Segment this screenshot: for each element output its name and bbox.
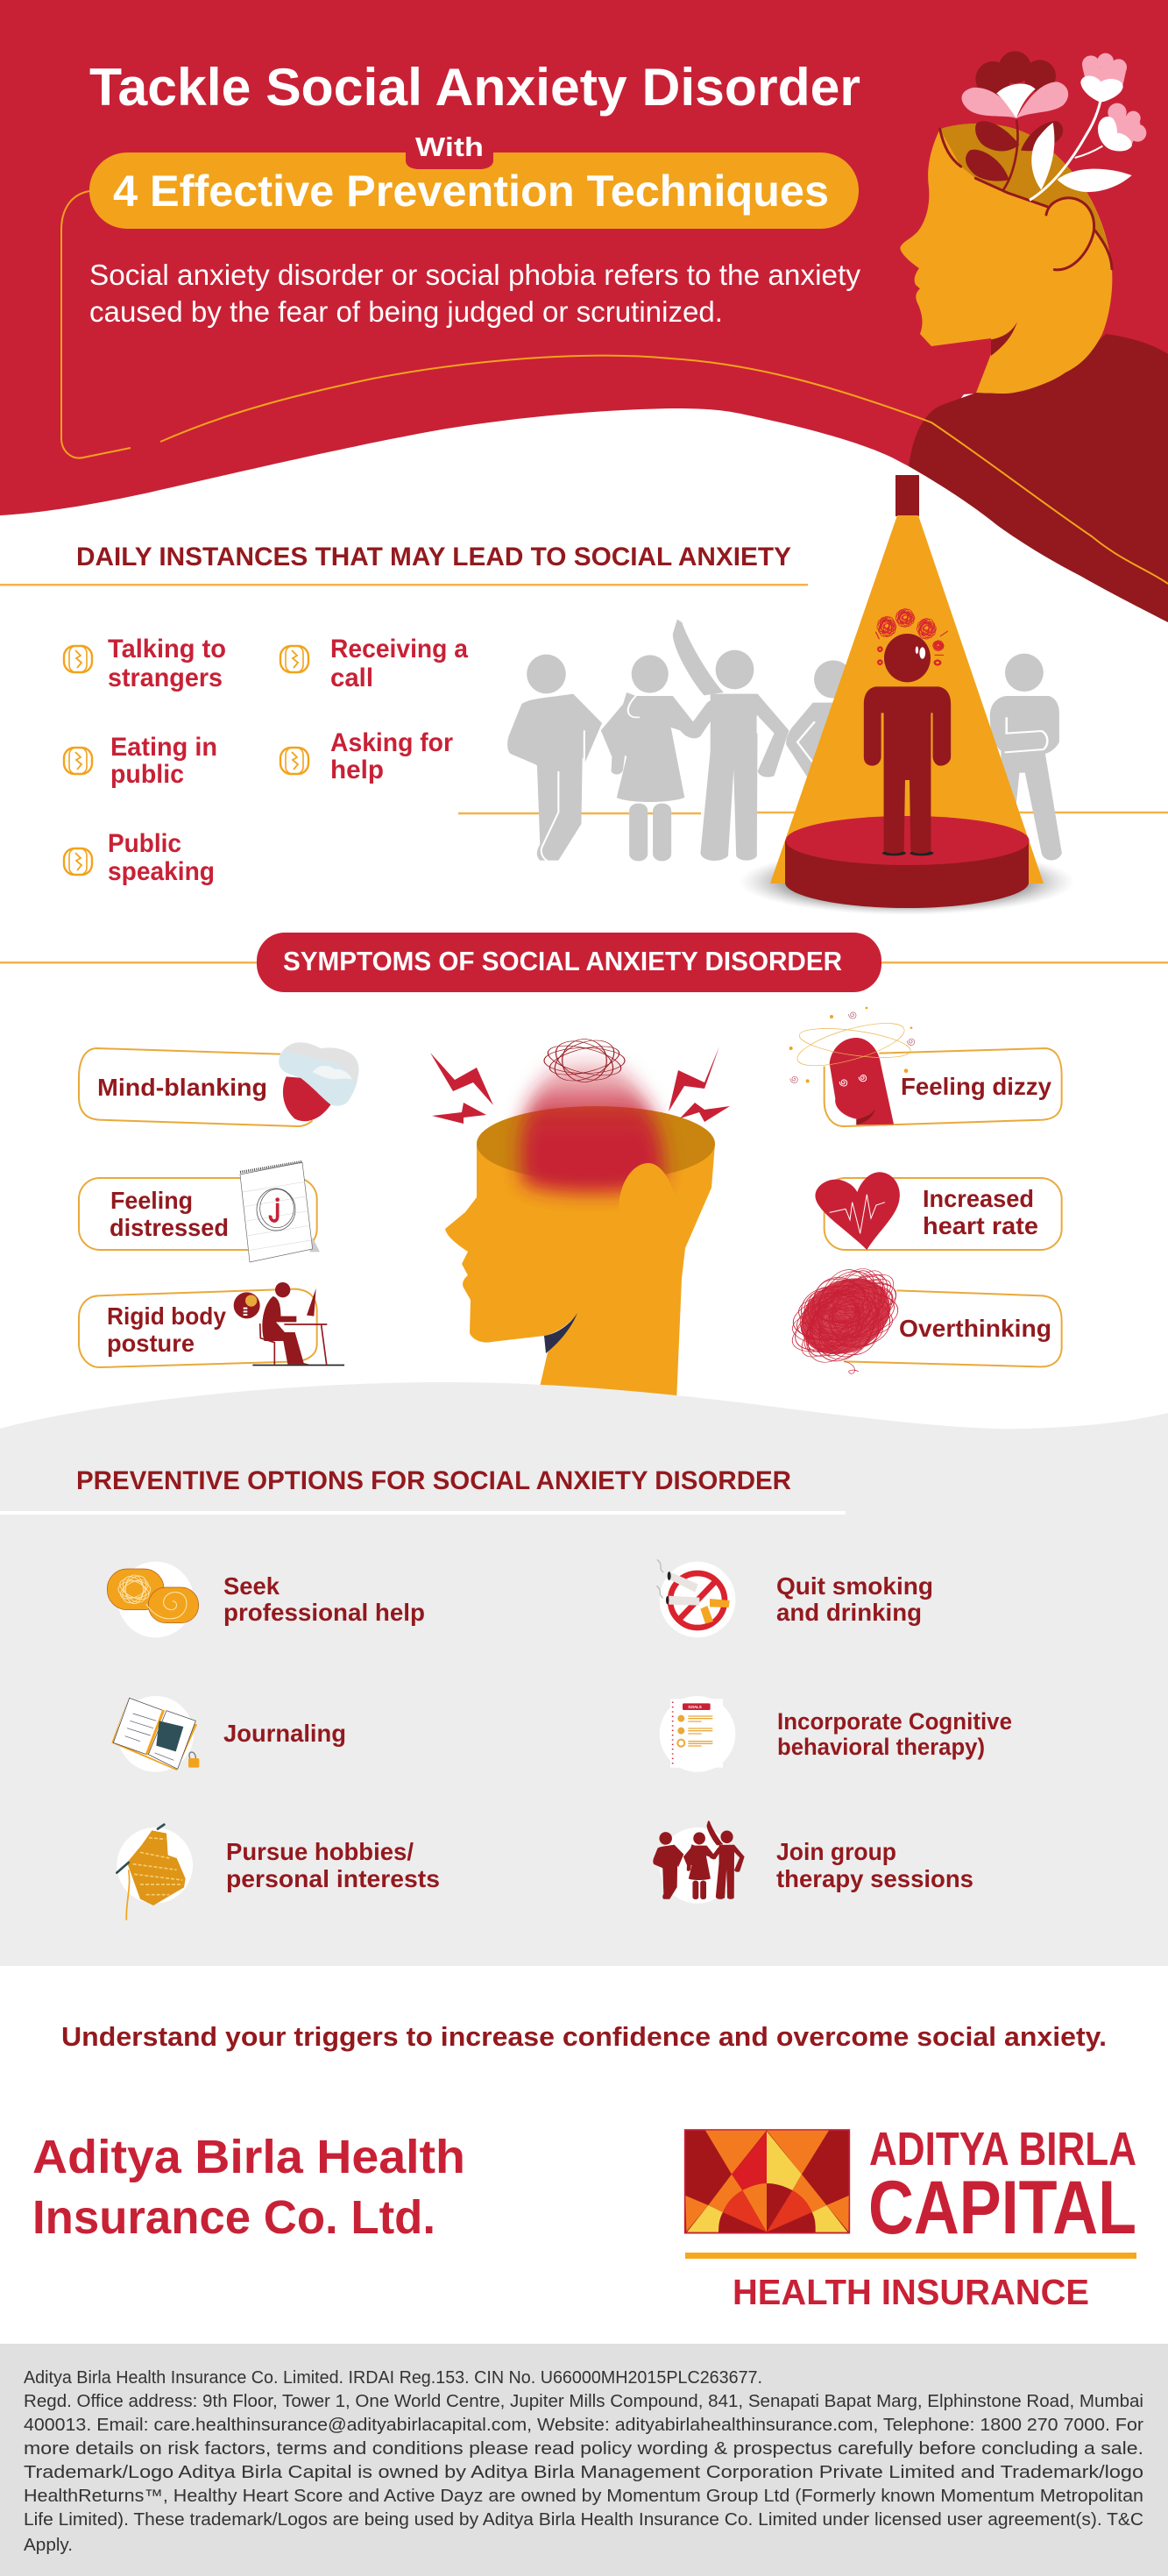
symptom labels: distressed: [110, 1214, 229, 1241]
decorative connector line: [61, 191, 1168, 584]
item: talking to strangers: Talking to: [108, 635, 226, 664]
illustration: central head: [445, 1059, 715, 1402]
panel: disclaimer footer: Life Limited). These trademark/Logos are being used by Aditya Birla Health Insurance Co. Limited under licensed user agreement(s). T&C: [24, 2510, 1143, 2530]
item: asking for help: [280, 728, 453, 784]
list: daily instances: [64, 635, 468, 886]
item: public speaking: Public: [108, 829, 181, 858]
list labels: preventive options: and drinking: [776, 1599, 922, 1626]
item: talking to strangers: [64, 635, 226, 692]
panel: disclaimer footer: Regd. Office address: 9th Floor, Tower 1, One World Centre, Jupiter Mills Compound, 841, Senapati Bapat Marg, Elphinstone Road, Mumbai: [24, 2392, 1143, 2411]
symptom labels: Rigid body: [107, 1302, 226, 1330]
item: public speaking: [64, 829, 215, 886]
symptom boxes right: [768, 1007, 1062, 1388]
symptom labels: heart rate: [923, 1212, 1038, 1239]
list labels: preventive options: Seek: [223, 1572, 280, 1600]
scribble above head: [539, 1035, 630, 1086]
icon: goals list: [660, 1696, 735, 1772]
shadow under pedestal: [739, 848, 1075, 915]
list labels: preventive options: Journaling: [223, 1720, 346, 1747]
icon: quit smoking: [656, 1559, 735, 1637]
icon: knitting: [117, 1825, 193, 1920]
symptom labels: Increased: [923, 1185, 1034, 1212]
logo: Aditya Birla Capital: HEALTH INSURANCE: [733, 2272, 1089, 2312]
box: overthinking: [768, 1240, 1062, 1388]
panel: disclaimer footer: 400013. Email: care.healthinsurance@adityabirlacapital.com, Website: adityabirlahealthinsurance.com, Telephone: 1800 270 7000. For: [24, 2416, 1143, 2435]
box: increased heart rate: [815, 1172, 1062, 1250]
box: feeling dizzy: [789, 1007, 1062, 1126]
icons: right column: [653, 1559, 745, 1904]
orange subtitle pill: With: [415, 131, 484, 162]
item: receiving a call: call: [330, 664, 373, 692]
intro text: [89, 259, 861, 328]
icon: group therapy: [653, 1820, 745, 1904]
heading: symptoms pill: [0, 933, 1168, 992]
spotlight lamp: [895, 475, 919, 516]
list labels: preventive options: therapy sessions: [776, 1865, 973, 1892]
item: eating in public: Eating in: [110, 733, 217, 762]
panel: disclaimer footer: more details on risk factors, terms and conditions please read policy wording & prospectus carefully before concluding a sale.: [24, 2439, 1143, 2459]
logo mark: [685, 2130, 849, 2233]
symptom boxes left: [79, 1042, 359, 1367]
spotlight cone: [770, 515, 1044, 884]
company name: [32, 2131, 465, 2244]
list labels: preventive options: behavioral therapy): [777, 1734, 985, 1760]
company name: Aditya Birla Health: [32, 2131, 465, 2183]
pedestal: [785, 816, 1029, 908]
intro text: caused by the fear of being judged or scrutinized.: [89, 295, 723, 328]
item: talking to strangers: strangers: [108, 664, 223, 692]
item: asking for help: Asking for: [330, 728, 453, 757]
symptom labels: posture: [107, 1330, 195, 1357]
list labels: preventive options: personal interests: [226, 1865, 440, 1892]
list labels: preventive options: Incorporate Cognitive: [777, 1708, 1012, 1735]
symptom labels: [97, 1073, 1051, 1357]
orange subtitle pill: 4 Effective Prevention Techniques: [113, 167, 829, 216]
illustration: grey crowd: [507, 620, 1062, 861]
panel: disclaimer footer: Apply.: [24, 2536, 73, 2555]
heading: preventive options: PREVENTIVE OPTIONS FOR SOCIAL ANXIETY DISORDER: [76, 1466, 791, 1495]
symptom labels: Feeling dizzy: [901, 1073, 1051, 1100]
icon: journaling: [111, 1696, 199, 1772]
panel: disclaimer footer: Aditya Birla Health Insurance Co. Limited. IRDAI Reg.153. CIN No. U66000MH2015PLC263677.: [24, 2368, 762, 2388]
box: feeling distressed: [79, 1161, 320, 1262]
panel: disclaimer footer: [0, 2344, 1168, 2576]
company name: Insurance Co. Ltd.: [32, 2191, 435, 2244]
list labels: preventive options: professional help: [223, 1599, 425, 1626]
illustration: man in spotlight: [864, 634, 951, 855]
item: receiving a call: [280, 635, 468, 692]
heading: daily instances: DAILY INSTANCES THAT MAY LEAD TO SOCIAL ANXIETY: [76, 543, 791, 571]
item: asking for help: help: [330, 756, 384, 784]
symptom labels: Overthinking: [899, 1315, 1051, 1342]
heading: preventive options: [0, 1466, 846, 1515]
item: eating in public: public: [110, 760, 184, 789]
icons: left column: [107, 1562, 199, 1920]
box: rigid body posture: [79, 1282, 344, 1367]
list labels: preventive options: Pursue hobbies/: [226, 1838, 414, 1865]
orange subtitle pill: [89, 131, 859, 229]
panel: disclaimer footer: HealthReturns™, Healthy Heart Score and Active Dayz are owned by Momentum Group Ltd (Formerly known Momentum Metropolitan: [24, 2487, 1143, 2506]
heading: symptoms pill: SYMPTOMS OF SOCIAL ANXIETY DISORDER: [283, 946, 842, 976]
intro text: Social anxiety disorder or social phobia refers to the anxiety: [89, 259, 861, 291]
item: public speaking: speaking: [108, 857, 215, 886]
item: receiving a call: Receiving a: [330, 635, 468, 664]
list labels: preventive options: [223, 1572, 1012, 1892]
panel: disclaimer footer: Trademark/Logo Aditya Birla Capital is owned by Aditya Birla Management Corporation Private Limited and Trademark/logo: [24, 2463, 1143, 2482]
title: Tackle Social Anxiety Disorder: [89, 58, 860, 117]
list labels: preventive options: Quit smoking: [776, 1572, 933, 1600]
symptom labels: Mind-blanking: [97, 1074, 267, 1101]
lightning bolts: [430, 1047, 730, 1124]
box: mind-blanking: [79, 1042, 359, 1126]
dark red shoulder shape: [909, 334, 1168, 622]
tagline: Understand your triggers to increase confidence and overcome social anxiety.: [61, 2021, 1107, 2052]
symptom labels: Feeling: [110, 1187, 193, 1214]
list labels: preventive options: Join group: [776, 1838, 896, 1865]
item: eating in public: [64, 733, 217, 789]
worry scribbles above man: [875, 607, 948, 666]
panel: preventive options grey background: [0, 1382, 1168, 1966]
icon: goals list: GOALS: [688, 1705, 702, 1709]
illustration: head with flowers: [900, 51, 1146, 394]
logo: Aditya Birla Capital: [685, 2123, 1136, 2312]
icon: seek professional help: [107, 1562, 199, 1637]
